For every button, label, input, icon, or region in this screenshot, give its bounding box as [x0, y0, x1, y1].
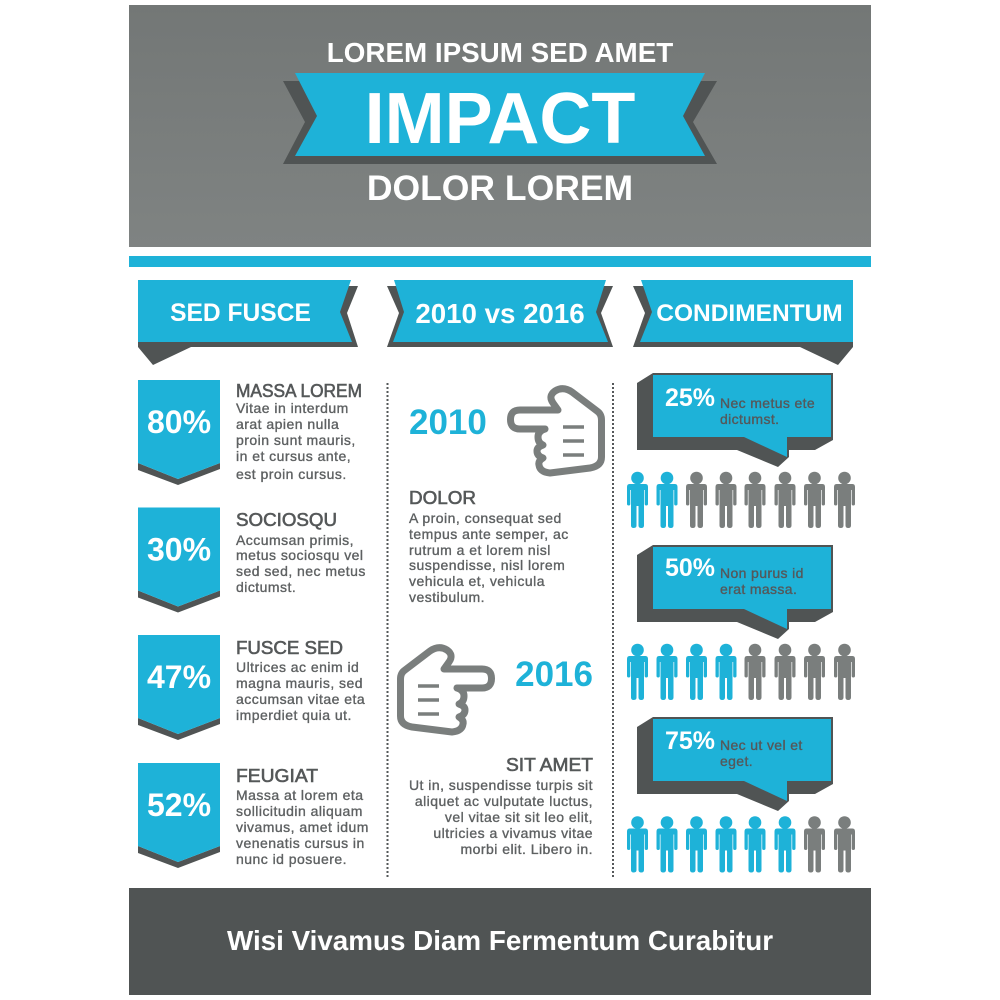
people row: 4 of 8 — [627, 644, 855, 700]
people row: 6 of 8 — [627, 816, 855, 872]
text: massa lorem: arat apien nulla — [236, 416, 339, 432]
chevron badge 80%: 80% — [147, 404, 211, 440]
text: massa lorem: Vitae in interdum — [236, 400, 349, 416]
text: feugiat: vivamus, amet idum — [236, 819, 369, 835]
text: feugiat: Massa at lorem eta — [236, 787, 364, 803]
column ribbon: sed fusce — [138, 280, 358, 365]
text: sociosqu: Accumsan primis, — [236, 532, 354, 548]
text: dolor — [409, 488, 569, 605]
text: dolor: vestibulum. — [409, 589, 485, 605]
main ribbon — [283, 73, 717, 164]
header subtitle: DOLOR LOREM — [367, 168, 633, 208]
callout: 75%: 75% — [665, 727, 715, 755]
text: feugiat: sollicitudin aliquam — [236, 803, 363, 819]
text: dolor: tempus ante semper, ac — [409, 526, 569, 542]
people row: 2 of 8 — [627, 472, 855, 528]
stat 80% — [138, 380, 362, 485]
text: massa lorem: proin sunt mauris, — [236, 432, 356, 448]
icon: hand pointing right — [400, 648, 492, 732]
text: massa lorem: est proin cursus. — [236, 466, 347, 482]
chevron badge 80% — [138, 380, 220, 485]
text: dolor: suspendisse, nisl lorem — [409, 557, 565, 573]
callout: 50%: Non purus id — [720, 565, 804, 581]
callout: 50%: erat massa. — [720, 581, 797, 597]
column ribbon: condimentum — [633, 280, 853, 365]
text: sit amet: SIT AMET — [506, 755, 593, 775]
text: dolor: rutrum a et lorem nisl — [409, 542, 551, 558]
text: sociosqu — [236, 510, 366, 595]
chevron badge 30%: 30% — [147, 532, 211, 568]
text: feugiat: nunc id posuere. — [236, 851, 347, 867]
callout: 25%: Nec metus ete — [720, 395, 815, 411]
text: feugiat: FEUGIAT — [236, 766, 318, 786]
footer panel: Wisi Vivamus Diam Fermentum Curabitur — [227, 925, 773, 956]
text: sit amet: vel vitae sit sit leo elit, — [445, 809, 593, 825]
callout: 50%: 50% — [665, 554, 715, 582]
callout: 75%: eget. — [720, 753, 753, 769]
callout: 75% — [637, 717, 833, 811]
callout: 50% — [637, 545, 833, 639]
text: dolor: A proin, consequat sed — [409, 510, 562, 526]
text: massa lorem: MASSA LOREM — [236, 381, 362, 401]
chevron badge 52%: 52% — [147, 787, 211, 823]
stat 52% — [138, 763, 369, 868]
text: massa lorem — [236, 381, 362, 482]
stat 30% — [138, 508, 366, 612]
callout: 25%: dictumst. — [720, 411, 779, 427]
icon: hand pointing left — [510, 389, 602, 473]
text: fusce sed: imperdiet quia ut. — [236, 707, 352, 723]
impact title: IMPACT — [365, 79, 635, 159]
callout: 75%: Nec ut vel et — [720, 737, 803, 753]
column ribbon: 2010 vs 2016: 2010 vs 2016 — [415, 298, 585, 329]
footer panel — [129, 888, 871, 995]
chevron badge 52% — [138, 763, 220, 868]
column ribbon: 2010 vs 2016 — [387, 280, 613, 347]
chevron badge 30% — [138, 508, 220, 612]
text: sit amet: ultricies a vivamus vitae — [433, 825, 593, 841]
text: dolor: vehicula et, vehicula — [409, 573, 545, 589]
text: fusce sed: FUSCE SED — [236, 638, 343, 658]
callout: 25% — [637, 373, 833, 467]
text: feugiat — [236, 766, 369, 867]
callout: 25%: 25% — [665, 384, 715, 412]
year label 2016: 2016 — [515, 655, 593, 694]
text: sit amet — [409, 755, 593, 857]
text: sociosqu: metus sociosqu vel — [236, 547, 364, 563]
text: sit amet: morbi elit. Libero in. — [460, 841, 593, 857]
column ribbon: sed fusce: SED FUSCE — [170, 300, 311, 327]
chevron badge 47% — [138, 635, 220, 740]
text: massa lorem: in et cursus ante, — [236, 448, 351, 464]
text: feugiat: venenatis cursus in — [236, 835, 365, 851]
header panel — [129, 5, 871, 247]
text: sociosqu: dictumst. — [236, 579, 296, 595]
text: dolor: DOLOR — [409, 488, 476, 508]
text: sit amet: aliquet ac vulputate luctus, — [415, 793, 593, 809]
column ribbon: condimentum: CONDIMENTUM — [656, 300, 843, 327]
text: fusce sed: Ultrices ac enim id — [236, 659, 359, 675]
text: fusce sed — [236, 638, 365, 723]
stat 47% — [138, 635, 365, 740]
chevron badge 47%: 47% — [147, 659, 211, 695]
text: sociosqu: SOCIOSQU — [236, 510, 337, 530]
text: sociosqu: sed sed, nec metus — [236, 563, 366, 579]
text: fusce sed: accumsan vitae eta — [236, 691, 365, 707]
header top line: LOREM IPSUM SED AMET — [327, 37, 673, 68]
text: sit amet: Ut in, suspendisse turpis sit — [409, 777, 593, 793]
text: fusce sed: magna mauris, sed — [236, 675, 363, 691]
blue divider bar — [129, 256, 871, 267]
year label 2010: 2010 — [409, 403, 487, 442]
